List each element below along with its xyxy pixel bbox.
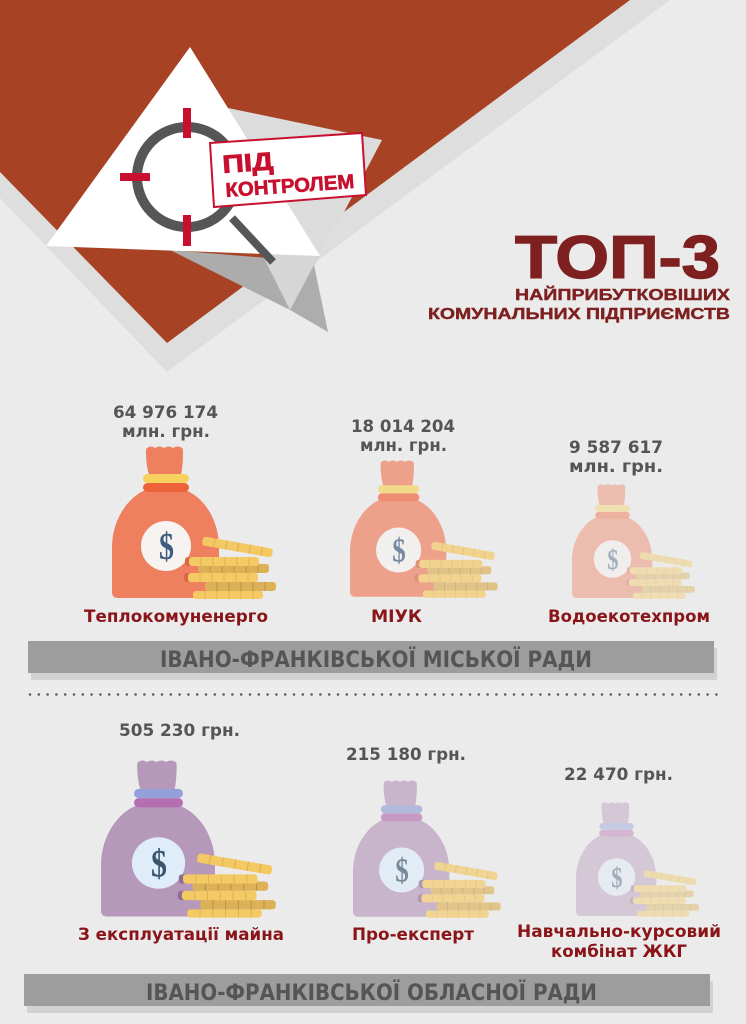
item: Навчально-курсовий комбінат ЖКГ: Навчально-курсовий [517, 922, 721, 942]
item: Теплокомуненерго [84, 403, 276, 627]
item: Водоекотехпром [548, 438, 710, 627]
item: З експлуатації майна: 505 230 грн. [119, 721, 240, 741]
item: З експлуатації майна: З експлуатації майна [78, 925, 284, 945]
icon: paper plane [46, 47, 382, 332]
stamp: під контролем [210, 133, 366, 207]
item: Навчально-курсовий комбінат ЖКГ [517, 765, 721, 962]
icon: magnifier with crosshair [120, 108, 273, 262]
stamp: під контролем: ПІД [221, 147, 275, 179]
item: Про-експерт: 215 180 грн. [346, 745, 466, 765]
banner: обласна рада: ІВАНО-ФРАНКІВСЬКОЇ ОБЛАСНОЇ РАДИ [146, 980, 597, 1006]
banner: міська рада [28, 641, 717, 680]
item: Водоекотехпром: 9 587 617 [569, 438, 663, 458]
title: НАЙПРИБУТКОВІШИХ [515, 285, 730, 304]
background: brown diamond with shadow [0, 0, 670, 372]
item: МІУК [350, 417, 498, 627]
item: З експлуатації майна [78, 721, 284, 945]
item: Про-експерт [346, 745, 501, 945]
banner: міська рада: ІВАНО-ФРАНКІВСЬКОЇ МІСЬКОЇ РАДИ [160, 647, 592, 673]
title: КОМУНАЛЬНИХ ПІДПРИЄМСТВ [428, 306, 730, 323]
item: Теплокомуненерго: 64 976 174 [113, 403, 218, 423]
item: МІУК: 18 014 204 [351, 417, 455, 437]
item: Навчально-курсовий комбінат ЖКГ: комбінат ЖКГ [551, 942, 687, 962]
banner: обласна рада [24, 974, 713, 1013]
stamp: під контролем: КОНТРОЛЕМ [225, 171, 355, 202]
item: Водоекотехпром: Водоекотехпром [548, 607, 710, 627]
item: МІУК: МІУК [371, 607, 422, 627]
item: Теплокомуненерго: Теплокомуненерго [84, 607, 268, 627]
item: МІУК: млн. грн. [360, 436, 447, 456]
item: Про-експерт: Про-експерт [352, 925, 474, 945]
item: Навчально-курсовий комбінат ЖКГ: 22 470 грн. [564, 765, 673, 785]
title [428, 224, 730, 323]
item: Водоекотехпром: млн. грн. [569, 457, 663, 477]
item: Теплокомуненерго: млн. грн. [122, 422, 210, 442]
title: ТОП-3 [515, 224, 720, 291]
